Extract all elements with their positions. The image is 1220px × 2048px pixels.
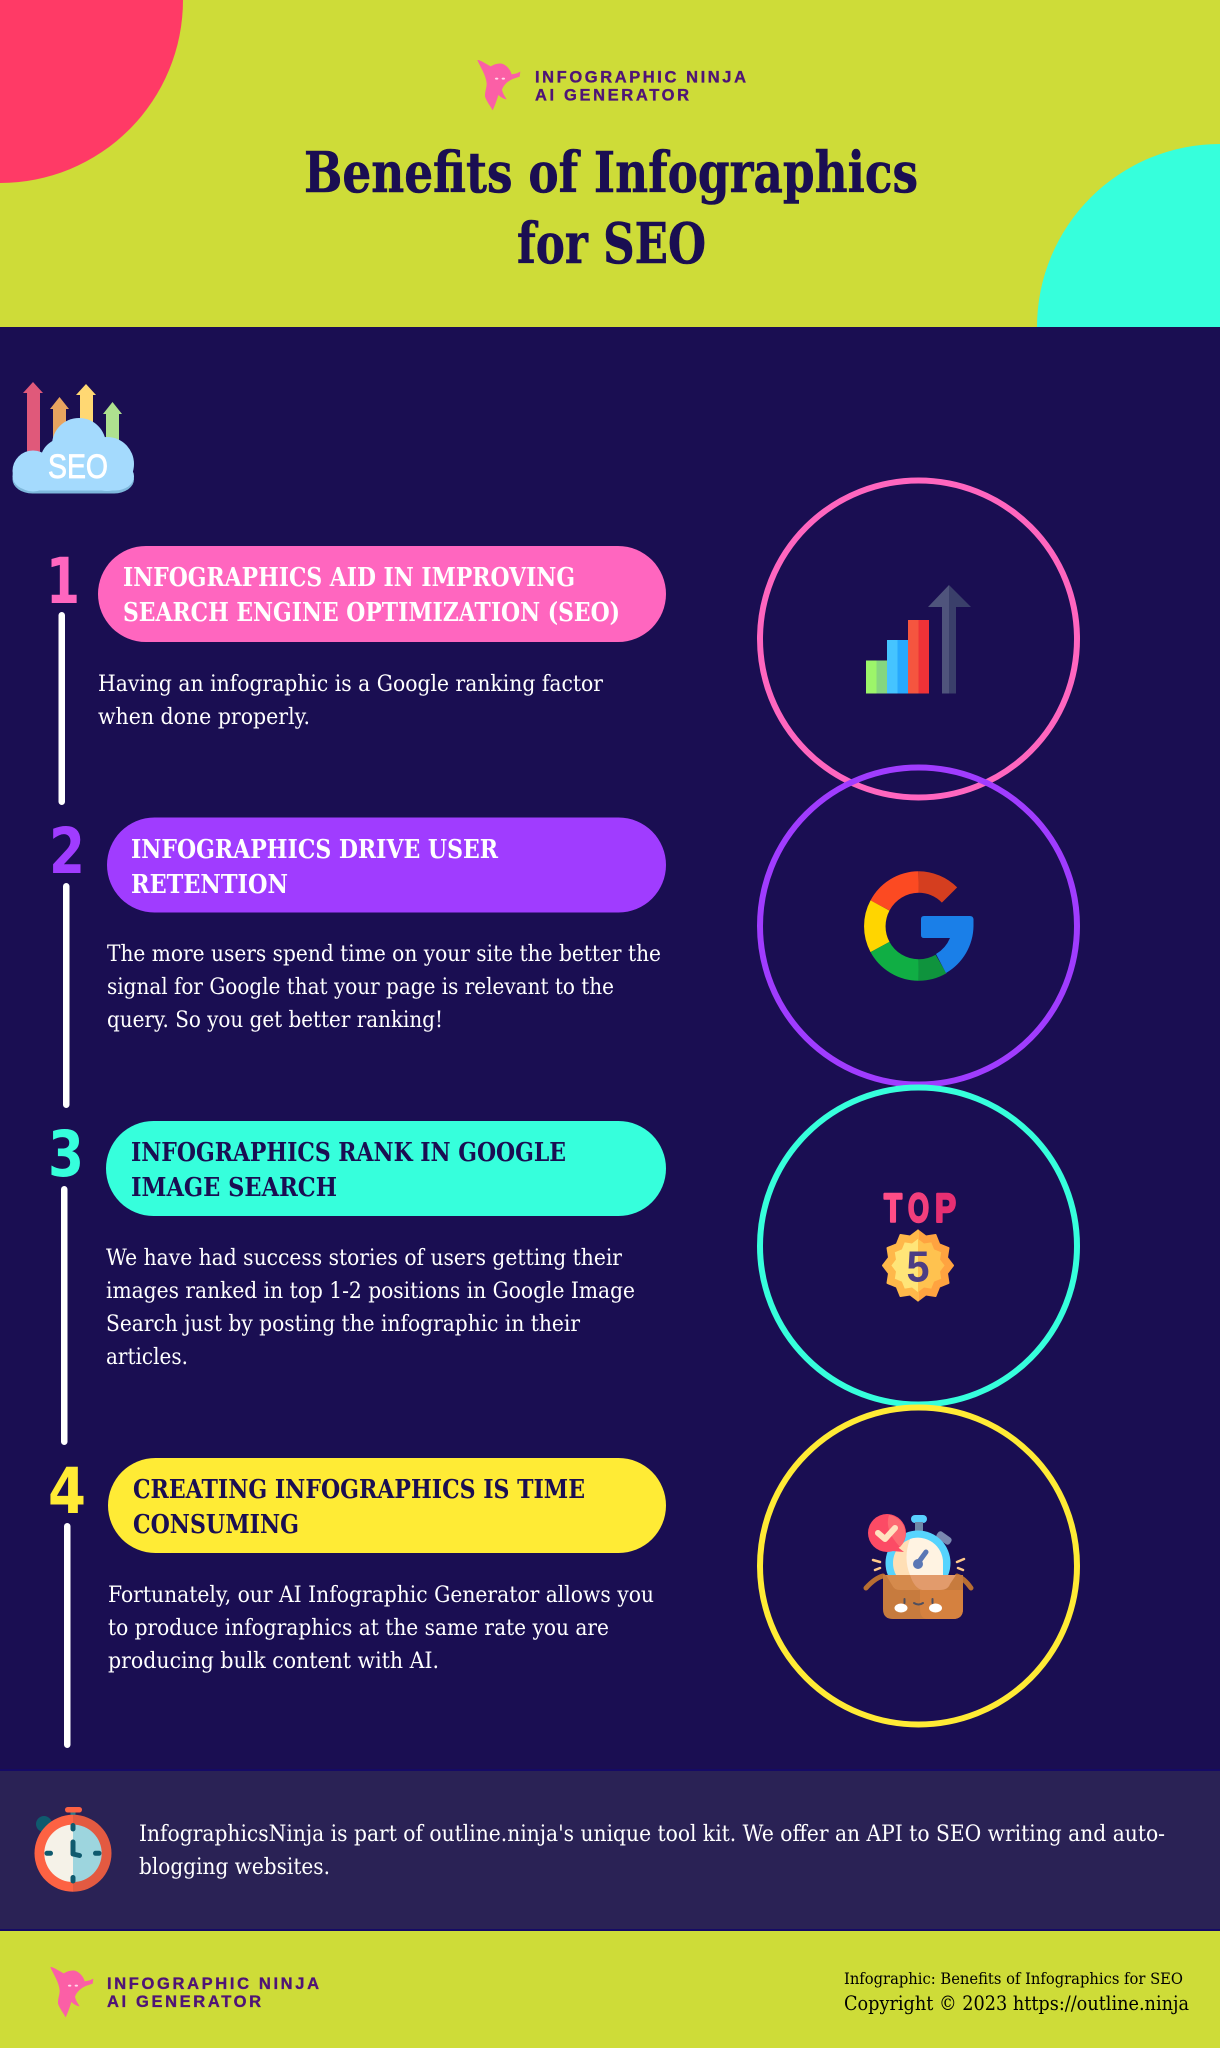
body text 4: Fortunately, our AI Infographic Generator allows you bbox=[108, 1583, 654, 1608]
panel: benefit 1 bbox=[46, 545, 666, 805]
icon: SEO cloud with arrows bbox=[12, 382, 134, 494]
icon: pink ninja bbox=[477, 60, 520, 110]
circle 2 with Google icon bbox=[760, 768, 1077, 1084]
footer credits bbox=[844, 1969, 1189, 2015]
heading pill 4 bbox=[108, 1458, 666, 1553]
footer wordmark bbox=[107, 1975, 319, 2011]
TOP lettering: O bbox=[908, 1186, 929, 1230]
title: Benefits of Infographics bbox=[304, 140, 918, 206]
heading pill 1: INFOGRAPHICS AID IN IMPROVING bbox=[123, 562, 575, 593]
icon: rising bars and arrow bbox=[866, 585, 971, 694]
body text 2: signal for Google that your page is relevant to the bbox=[107, 975, 614, 1000]
TOP lettering: T bbox=[884, 1186, 902, 1230]
icon: footer ninja bbox=[50, 1967, 93, 2017]
logo wordmark bbox=[535, 68, 746, 104]
timeline line 1 bbox=[58, 612, 65, 805]
icon: SEO cloud with arrows: SEO bbox=[48, 448, 108, 486]
icon: stopwatch bbox=[34, 1807, 112, 1892]
decorative teal quarter circle bbox=[1037, 144, 1220, 327]
panel: benefit 2 bbox=[49, 815, 666, 1108]
TOP lettering bbox=[884, 1186, 956, 1230]
info text bbox=[139, 1822, 1165, 1880]
body text 3: images ranked in top 1-2 positions in Google Image bbox=[106, 1279, 635, 1304]
body text 3: We have had success stories of users getting their bbox=[106, 1246, 622, 1271]
body text 2 bbox=[107, 942, 661, 1033]
body text 2: The more users spend time on your site the better the bbox=[107, 942, 661, 967]
info text: blogging websites. bbox=[139, 1855, 330, 1880]
logo: infographic ninja bbox=[477, 60, 746, 110]
icon: top 5 badge bbox=[883, 1186, 956, 1300]
title: for SEO bbox=[517, 211, 706, 277]
header panel bbox=[0, 0, 1220, 327]
circle 1 with bar chart icon bbox=[760, 480, 1077, 798]
footer wordmark: AI GENERATOR bbox=[107, 1993, 261, 2011]
circle 3 with top 5 icon bbox=[760, 1088, 1077, 1404]
heading pill 2: INFOGRAPHICS DRIVE USER bbox=[131, 834, 499, 865]
TOP lettering: P bbox=[935, 1186, 956, 1230]
decorative red quarter circle bbox=[0, 0, 183, 183]
badge with 5: 5 bbox=[906, 1242, 930, 1292]
heading pill 3 bbox=[106, 1121, 666, 1216]
panel: benefit 4 bbox=[48, 1455, 666, 1748]
icon: stopwatch in a box bbox=[866, 1514, 971, 1619]
logo wordmark: INFOGRAPHIC NINJA bbox=[535, 68, 746, 86]
body text 3 bbox=[106, 1246, 635, 1370]
heading pill 1: SEARCH ENGINE OPTIMIZATION (SEO) bbox=[123, 597, 620, 628]
footer logo bbox=[50, 1967, 319, 2017]
icon: Google G bbox=[875, 882, 974, 973]
body text 2: query. So you get better ranking! bbox=[107, 1008, 443, 1033]
heading pill 2: RETENTION bbox=[131, 869, 288, 900]
heading pill 3: INFOGRAPHICS RANK IN GOOGLE bbox=[131, 1137, 566, 1168]
footer credits: Infographic: Benefits of Infographics for SEO bbox=[844, 1969, 1183, 1988]
heading pill 4: CONSUMING bbox=[133, 1509, 299, 1540]
info band bbox=[0, 1769, 1220, 1931]
body text 3: Search just by posting the infographic in their bbox=[106, 1312, 580, 1337]
panel: benefit 3 bbox=[48, 1118, 666, 1445]
body text 3: articles. bbox=[106, 1345, 188, 1370]
body text 1 bbox=[98, 672, 603, 730]
timeline line 3 bbox=[61, 1186, 68, 1445]
number 3: 3 bbox=[48, 1118, 84, 1191]
timeline line 2 bbox=[63, 883, 70, 1108]
heading pill 3: IMAGE SEARCH bbox=[131, 1172, 337, 1203]
body text 4: to produce infographics at the same rate you are bbox=[108, 1616, 609, 1641]
number 1: 1 bbox=[46, 545, 80, 618]
circle 4 with stopwatch box icon bbox=[760, 1408, 1077, 1724]
body text 4: producing bulk content with AI. bbox=[108, 1649, 439, 1674]
body text 4 bbox=[108, 1583, 654, 1674]
logo wordmark: AI GENERATOR bbox=[535, 86, 689, 104]
number 4: 4 bbox=[48, 1455, 86, 1528]
heading pill 4: CREATING INFOGRAPHICS IS TIME bbox=[133, 1474, 585, 1505]
title bbox=[304, 140, 918, 277]
body text 1: Having an infographic is a Google ranking factor bbox=[98, 672, 603, 697]
body text 1: when done properly. bbox=[98, 705, 310, 730]
footer panel bbox=[0, 1931, 1220, 2048]
heading pill 1 bbox=[98, 546, 666, 642]
timeline line 4 bbox=[64, 1523, 70, 1748]
number 2: 2 bbox=[49, 815, 85, 888]
footer wordmark: INFOGRAPHIC NINJA bbox=[107, 1975, 319, 1993]
heading pill 2 bbox=[107, 818, 666, 912]
